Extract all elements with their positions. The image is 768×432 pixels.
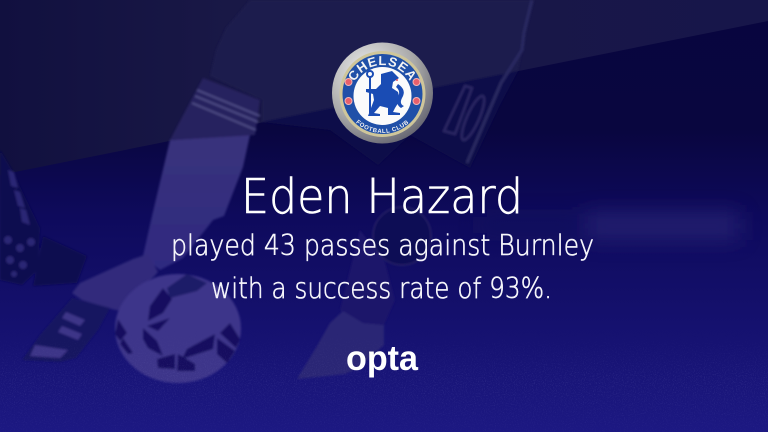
sock band: [170, 78, 260, 140]
photo: player shin and sock: [22, 78, 260, 362]
photo: player shorts: [210, 0, 534, 168]
text: stat line two: with a success rate of 93%.: [211, 272, 552, 305]
background: blurred stadium glow: [480, 212, 740, 240]
crest: gold ring: [340, 51, 426, 137]
text: stat line one: played 43 passes against Burnley: [171, 229, 594, 262]
icon: Chelsea FC crest: [332, 42, 433, 144]
photo: football: [115, 274, 241, 383]
crest: white centre: [354, 67, 412, 125]
crest: CHELSEA lettering: CHELSEA: [349, 56, 416, 81]
crest: silver rim: [332, 42, 433, 144]
photo: right foot and boot: [297, 207, 431, 379]
crest: FOOTBALL CLUB lettering: FOOTBALL CLUB: [356, 120, 408, 133]
dark circular object: [373, 207, 431, 265]
photo: grass grain: [0, 351, 768, 428]
boot on ball: [72, 254, 158, 312]
heading: player name: Eden Hazard: [241, 169, 523, 225]
shorts: number 10: [444, 86, 488, 142]
crest: blue ring: [342, 54, 422, 134]
photo: left trailing boot: [0, 150, 87, 286]
logo: opta: opta: [346, 339, 419, 378]
background: upper diagonal band: [0, 0, 768, 175]
shorts: side stripe: [467, 0, 532, 163]
crest: lion tongue: [396, 79, 398, 81]
crest: roses: [345, 78, 420, 104]
crest: lion with staff: [366, 71, 404, 116]
